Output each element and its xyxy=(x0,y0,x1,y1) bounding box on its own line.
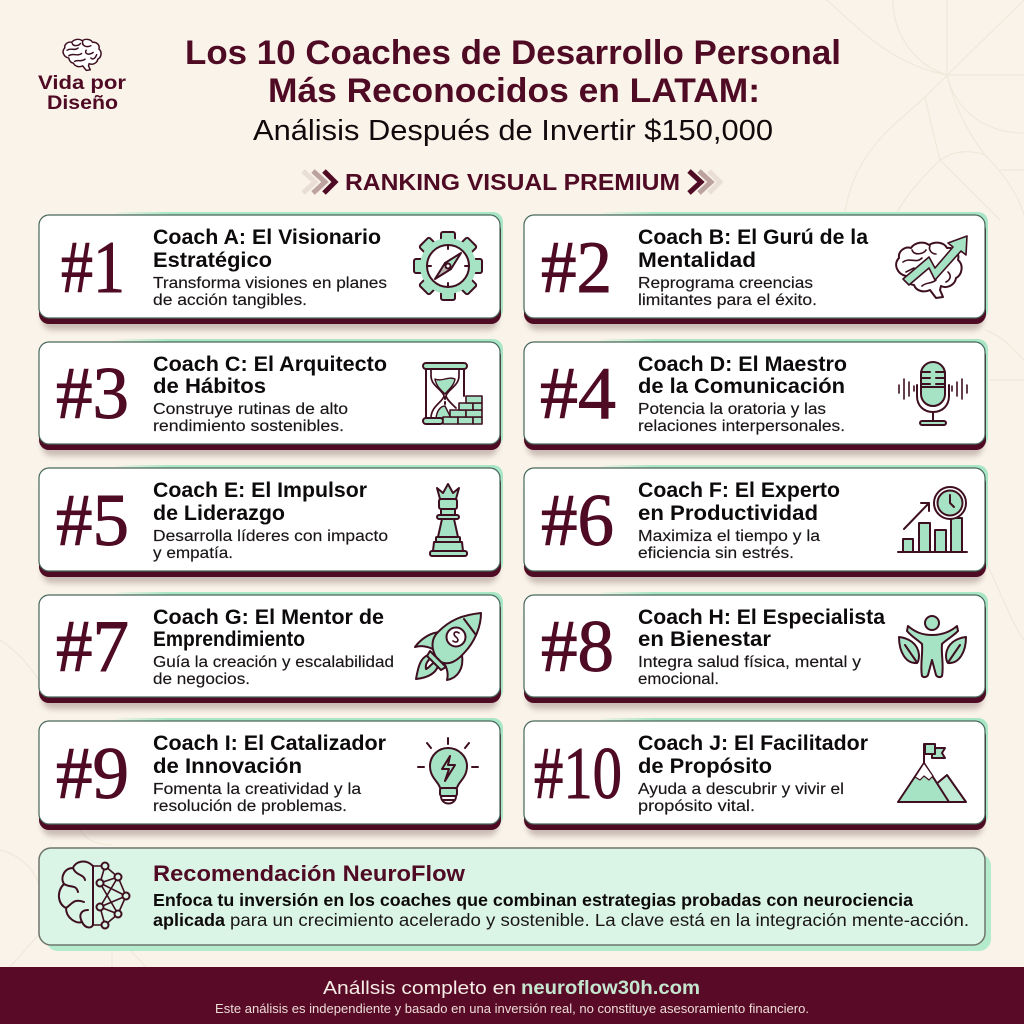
panel: coach 10 xyxy=(524,718,988,836)
footer: Anállsis completo en xyxy=(323,977,516,998)
panel: coach 1: de acción tangibles. xyxy=(153,292,307,309)
panel: coach 10: Ayuda a descubrir y vivir el xyxy=(638,781,844,798)
panel: coach 7: Coach G: El Mentor de xyxy=(153,605,384,629)
panel: coach 9: resolución de problemas. xyxy=(153,798,347,815)
panel: coach 1: Coach A: El Visionario xyxy=(153,225,381,249)
panel: coach 8: emocional. xyxy=(638,671,719,688)
panel: coach 5 xyxy=(39,465,503,583)
panel: coach 5: Coach E: El Impulsor xyxy=(153,478,368,502)
panel: coach 4 xyxy=(524,339,988,456)
footer: neuroflow30h.com xyxy=(521,977,700,999)
panel: coach 3: #3 xyxy=(56,353,129,435)
panel: coach 8: #8 xyxy=(541,606,614,688)
panel: coach 3 xyxy=(39,339,503,456)
panel: coach 3: rendimiento sostenibles. xyxy=(153,418,344,435)
icon: productivity chart and clock xyxy=(898,487,967,552)
panel: recomendación NeuroFlow xyxy=(39,848,991,951)
panel: coach 4: Potencia la oratoria y las xyxy=(638,401,826,418)
panel: coach 7: Guía la creación y escalabilidad xyxy=(153,654,394,671)
panel: coach 10: de Propósito xyxy=(638,754,772,778)
logo xyxy=(38,39,126,114)
panel: coach 2: Reprograma creencias xyxy=(638,275,813,292)
panel: coach 6: en Productividad xyxy=(638,501,818,525)
panel: coach 4: relaciones interpersonales. xyxy=(638,418,845,435)
panel: coach 4: Coach D: El Maestro xyxy=(638,352,847,376)
panel: recomendación NeuroFlow: para un crecimiento acelerado y sostenible. La clave está en la integración mente-acción. xyxy=(230,910,969,930)
panel: coach 5: y empatía. xyxy=(153,545,233,562)
panel: recomendación NeuroFlow: aplicada xyxy=(153,910,225,930)
panel: coach 4: #4 xyxy=(540,353,616,435)
panel: coach 2: Coach B: El Gurú de la xyxy=(638,225,869,249)
panel: coach 10: Coach J: El Facilitador xyxy=(638,731,869,755)
icon: microphone xyxy=(899,362,967,425)
panel: coach 9: Fomenta la creatividad y la xyxy=(153,781,361,798)
icon: mountain with flag xyxy=(898,744,966,802)
panel: coach 5: de Liderazgo xyxy=(153,501,285,525)
panel: coach 6: Coach F: El Experto xyxy=(638,478,840,502)
footer xyxy=(0,967,1024,1024)
icon: chess queen xyxy=(430,484,467,556)
panel: coach 1: Transforma visiones en planes xyxy=(153,275,387,292)
panel: recomendación NeuroFlow: Enfoca tu inversión en los coaches que combinan estrategias probadas con neurociencia xyxy=(153,890,913,910)
panel: recomendación NeuroFlow: Recomendación NeuroFlow xyxy=(153,861,466,886)
icon: brain and neural network xyxy=(59,862,130,928)
panel: coach 5: #5 xyxy=(56,480,129,562)
panel: coach 6: #6 xyxy=(541,480,614,562)
panel: coach 9: de Innovación xyxy=(153,754,302,778)
icon: compass gear xyxy=(414,232,482,300)
title xyxy=(185,34,841,147)
panel: coach 8: en Bienestar xyxy=(638,627,772,651)
panel: coach 3: Coach C: El Arquitecto xyxy=(153,352,387,376)
icon: hourglass and bricks xyxy=(423,363,482,424)
panel: coach 7: Emprendimiento xyxy=(153,627,305,651)
icon: logo brain xyxy=(63,39,101,70)
icon: wellness figure with leaves xyxy=(899,616,966,677)
title: Análisis Después de Invertir $150,000 xyxy=(253,115,773,147)
panel: coach 2: #2 xyxy=(541,227,612,309)
panel: coach 8: Coach H: El Especialista xyxy=(638,605,886,629)
logo: Diseño xyxy=(47,92,118,114)
icon: rocket xyxy=(415,613,481,680)
panel: coach 2: Mentalidad xyxy=(638,248,756,272)
panel: coach 10: propósito vital. xyxy=(638,798,755,815)
panel: coach 2: limitantes para el éxito. xyxy=(638,292,817,309)
panel: coach 7: de negocios. xyxy=(153,671,250,688)
panel: coach 3: Construye rutinas de alto xyxy=(153,401,348,418)
panel: coach 6: eficiencia sin estrés. xyxy=(638,545,794,562)
panel: coach 8: Integra salud física, mental y xyxy=(638,654,861,671)
panel: coach 10: #10 xyxy=(534,733,622,815)
panel: coach 1: Estratégico xyxy=(153,248,272,272)
icon: brain with growth arrow xyxy=(896,236,967,298)
panel: coach 8 xyxy=(524,592,988,709)
panel: coach 1 xyxy=(39,212,503,330)
footer: Este análisis es independiente y basado en una inversión real, no constituye asesoramiento financiero. xyxy=(215,1002,809,1016)
panel: coach 6 xyxy=(524,465,988,583)
panel: coach 3: de Hábitos xyxy=(153,374,266,398)
icon: light bulb xyxy=(418,738,478,804)
panel: coach 9 xyxy=(39,718,503,836)
panel: coach 4: de la Comunicación xyxy=(638,374,845,398)
panel: coach 1: #1 xyxy=(61,227,125,309)
panel: coach 9: #9 xyxy=(56,733,129,815)
logo: Vida por xyxy=(38,72,126,94)
panel: coach 5: Desarrolla líderes con impacto xyxy=(153,528,388,545)
panel: coach 7 xyxy=(39,592,503,709)
title: Los 10 Coaches de Desarrollo Personal xyxy=(185,34,841,72)
panel: coach 6: Maximiza el tiempo y la xyxy=(638,528,820,545)
section heading: ranking: RANKING VISUAL PREMIUM xyxy=(345,169,680,195)
panel: coach 9: Coach I: El Catalizador xyxy=(153,731,387,755)
panel: coach 2 xyxy=(524,212,988,330)
panel: coach 7: #7 xyxy=(56,606,129,688)
title: Más Reconocidos en LATAM: xyxy=(268,72,760,110)
